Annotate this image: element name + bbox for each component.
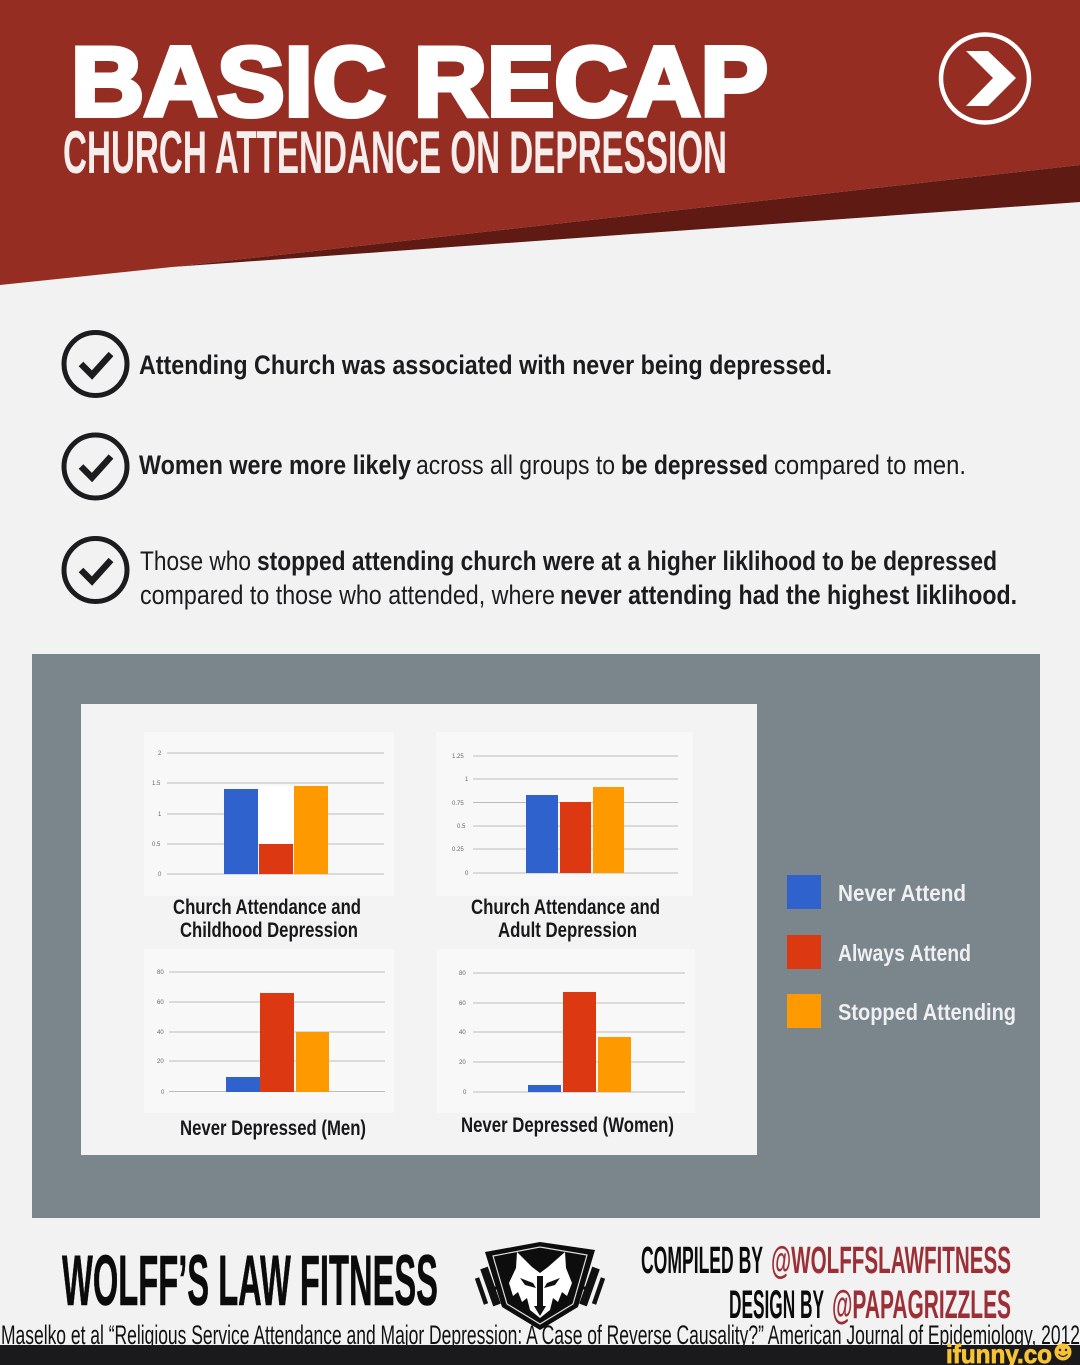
chart: adult depression: 0.25 bbox=[452, 847, 464, 853]
legend bbox=[787, 875, 1016, 1028]
legend item: stopped attending: Stopped Attending bbox=[838, 999, 1016, 1025]
point 2 text: across all groups to bbox=[416, 450, 615, 480]
chart caption: childhood bbox=[173, 896, 361, 942]
chart: childhood depression: 0 bbox=[158, 872, 162, 878]
credits bbox=[641, 1240, 1011, 1327]
credit: compiled by: COMPILED BY bbox=[641, 1240, 763, 1282]
chart: childhood depression: 1 bbox=[158, 812, 162, 818]
chart caption: childhood: Childhood Depression bbox=[180, 919, 358, 942]
chart: never depressed women: 80 bbox=[459, 971, 466, 977]
point 2 text bbox=[139, 450, 966, 480]
chart: childhood depression: 1.5 bbox=[152, 781, 161, 787]
chart: never depressed women: 0 bbox=[463, 1090, 467, 1096]
icon: wolf logo with dumbbell bbox=[477, 1242, 603, 1330]
icon: check mark 1 bbox=[64, 332, 127, 396]
point 3 text: Those who bbox=[140, 546, 251, 576]
panel: charts and legend bbox=[32, 654, 1040, 1218]
chart: childhood depression: 0.5 bbox=[152, 842, 161, 848]
chart: never depressed women: 20 bbox=[459, 1060, 466, 1066]
legend item: never attend bbox=[787, 875, 966, 909]
icon: arrow in circle bbox=[941, 34, 1029, 122]
chart: adult depression bbox=[436, 732, 693, 896]
chart: childhood depression bbox=[144, 732, 394, 896]
chart: adult depression: 0.75 bbox=[452, 801, 464, 807]
point 2 text: compared to men. bbox=[774, 450, 966, 480]
chart caption: childhood: Church Attendance and bbox=[173, 896, 361, 919]
key point 2 bbox=[64, 435, 966, 498]
title: BASIC RECAP bbox=[71, 26, 768, 136]
chart: never depressed men: 60 bbox=[157, 1000, 164, 1006]
chart: adult depression: 0.5 bbox=[457, 824, 466, 830]
icon: check mark 2 bbox=[64, 435, 127, 498]
text: WOLFF’S LAW FITNESS bbox=[62, 1242, 438, 1321]
chart: never depressed women bbox=[437, 949, 695, 1113]
chart: never depressed men: 40 bbox=[157, 1030, 164, 1036]
chart caption: adult bbox=[471, 896, 660, 942]
chart: never depressed women: 40 bbox=[459, 1030, 466, 1036]
chart caption: adult: Church Attendance and bbox=[471, 896, 660, 919]
point 2 text: Women were more likely bbox=[139, 450, 411, 480]
chart: adult depression: 1.25 bbox=[452, 754, 464, 760]
chart: never depressed men: 80 bbox=[157, 970, 164, 976]
key point 1 bbox=[64, 332, 832, 396]
key point 3 bbox=[64, 538, 1017, 610]
icon: check mark 3 bbox=[64, 538, 127, 602]
point 2 text: be depressed bbox=[621, 450, 768, 480]
chart: never depressed men: 0 bbox=[161, 1090, 165, 1096]
legend item: stopped attending bbox=[787, 994, 1016, 1028]
chart: adult depression: 1 bbox=[465, 777, 469, 783]
credit: design by: DESIGN BY bbox=[729, 1283, 824, 1327]
point 3 text bbox=[140, 546, 1017, 610]
header banner bbox=[0, 0, 1080, 285]
point 3 text: never attending had the highest liklihood. bbox=[560, 580, 1017, 610]
chart caption: women: Never Depressed (Women) bbox=[461, 1114, 674, 1137]
legend item: never attend: Never Attend bbox=[838, 880, 966, 906]
chart: childhood depression: 2 bbox=[158, 751, 162, 757]
chart caption: men: Never Depressed (Men) bbox=[180, 1117, 366, 1140]
legend item: always attend bbox=[787, 935, 971, 969]
chart: never depressed men: 20 bbox=[157, 1059, 164, 1065]
legend item: always attend: Always Attend bbox=[838, 940, 971, 966]
panel: chart sheet bbox=[81, 704, 757, 1155]
chart: adult depression: 0 bbox=[465, 871, 469, 877]
point 3 text: compared to those who attended, where bbox=[140, 580, 555, 610]
chart caption: adult: Adult Depression bbox=[498, 919, 637, 942]
bottom watermark bar bbox=[0, 1339, 1080, 1365]
point 1 text: Attending Church was associated with never being depressed. bbox=[139, 350, 832, 380]
icon: smiley bbox=[1054, 1344, 1072, 1360]
chart: never depressed women: 60 bbox=[459, 1001, 466, 1007]
chart: never depressed men bbox=[144, 949, 394, 1113]
